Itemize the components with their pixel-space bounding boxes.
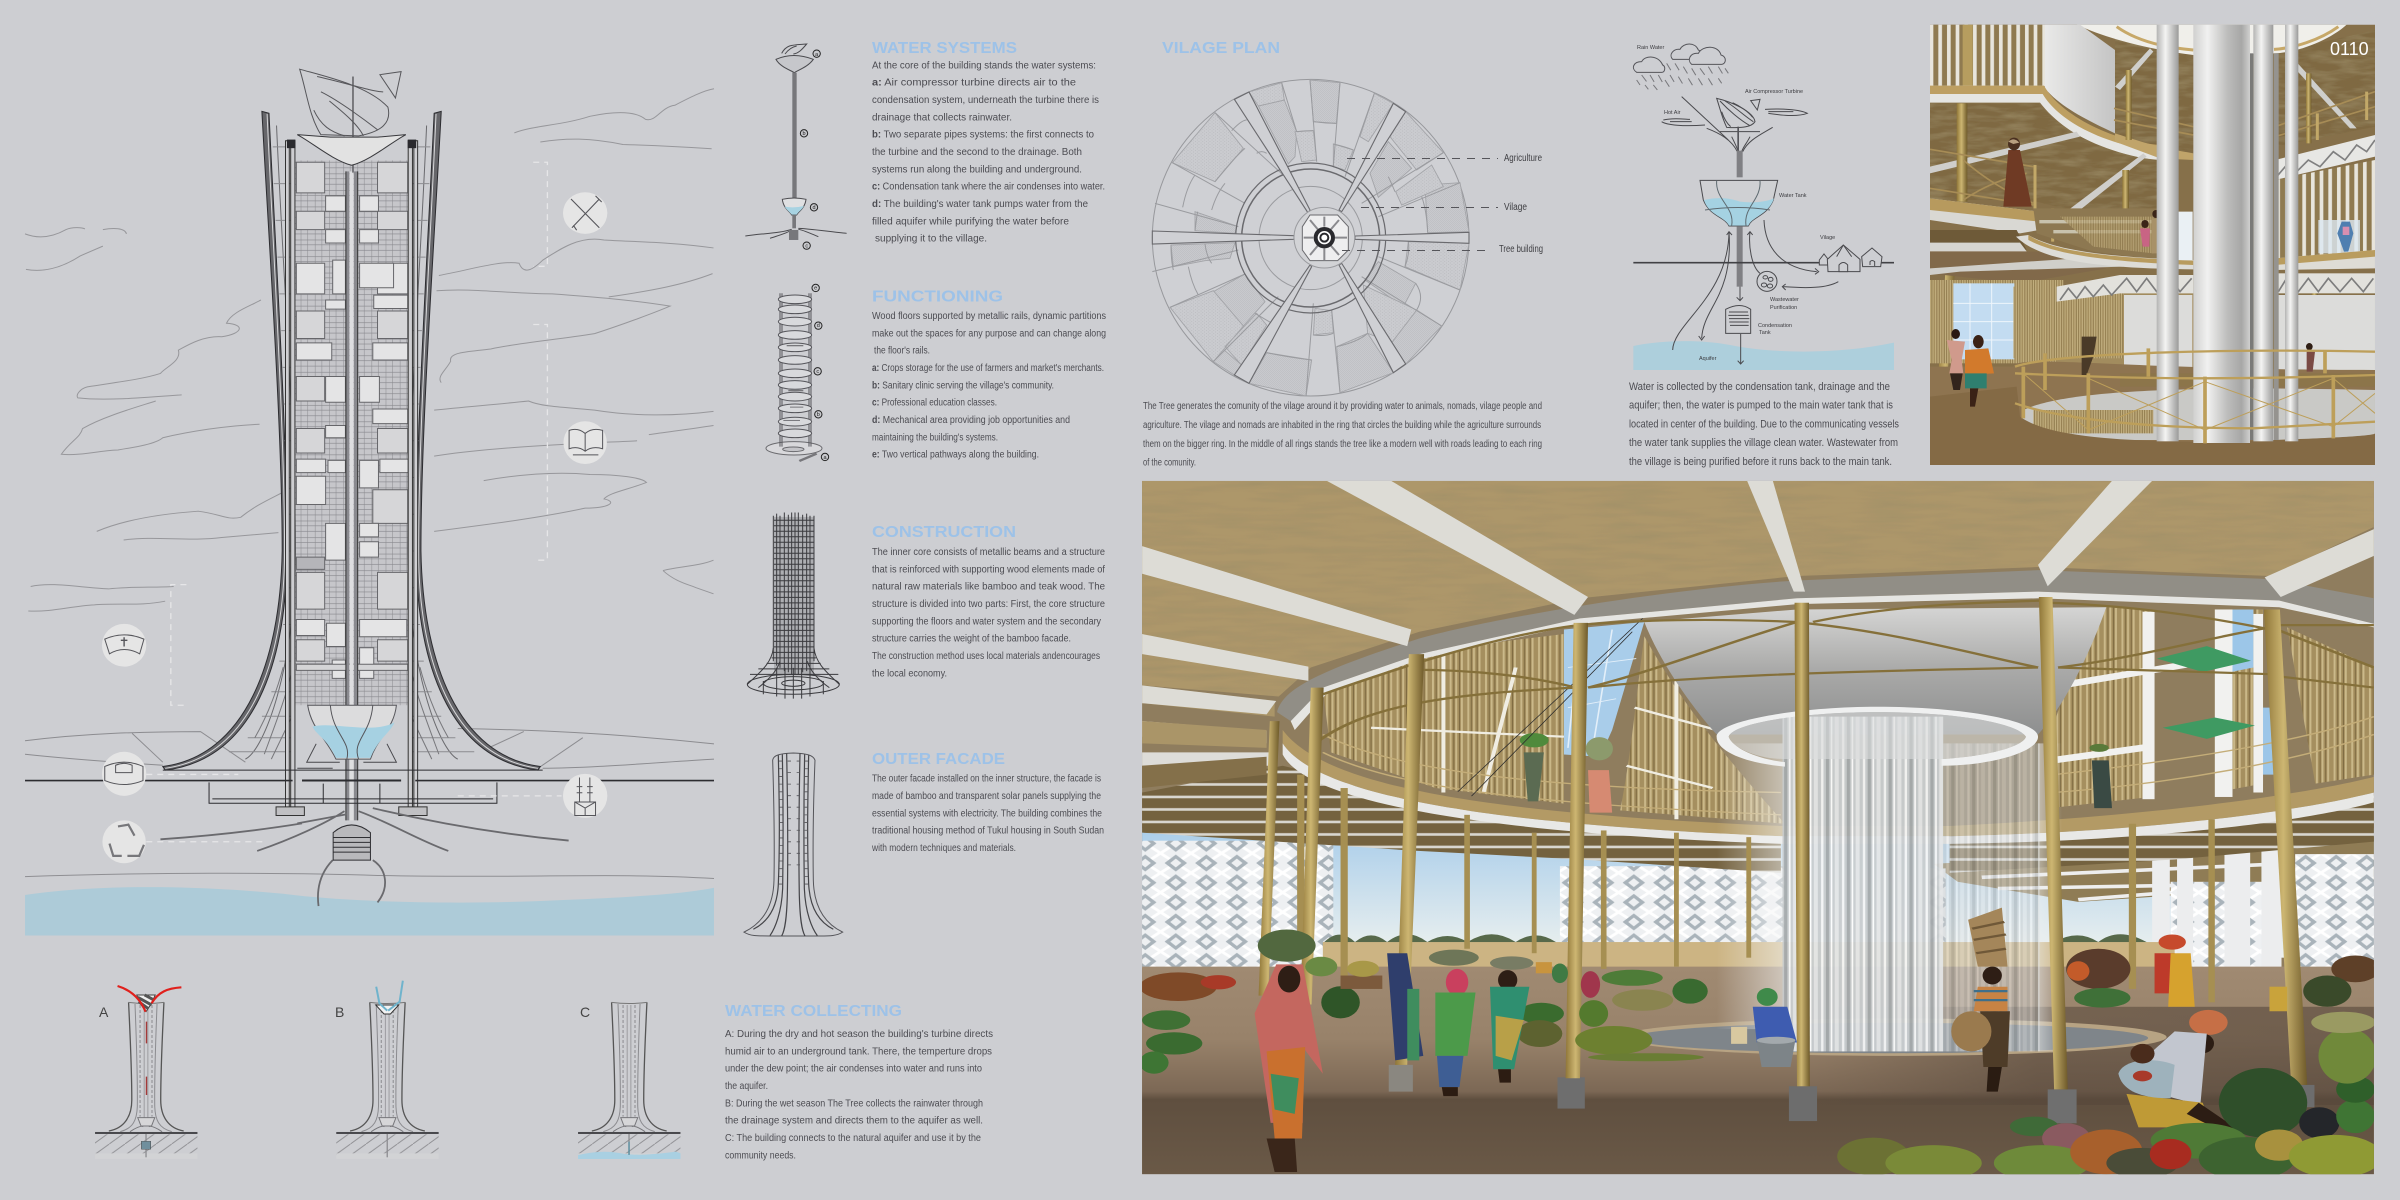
- diagram A letter: A: [99, 1004, 109, 1020]
- water cycle labels: Hot Air: [1664, 110, 1681, 116]
- sky: [1142, 828, 2374, 958]
- water tank: [1700, 180, 1778, 226]
- white drum wall: [2045, 25, 2115, 133]
- turbine leaf: [300, 69, 401, 173]
- lower ceiling below gallery: [1142, 766, 1781, 873]
- top left railing: [1930, 25, 2045, 86]
- text: village plan: agriculture. The vilage and nomads are inhabited in the ring that circles the building while the agriculture surrounds: [1143, 420, 1541, 431]
- text: village plan: of the comunity.: [1143, 458, 1196, 469]
- water cycle labels: Water Tank: [1779, 193, 1807, 199]
- text: water systems: filled aquifer while purifying the water before: [872, 216, 1069, 227]
- text: water cycle: Water is collected by the condensation tank, drainage and the: [1629, 381, 1890, 393]
- text: water systems: [872, 60, 1105, 245]
- bamboo facade left: [1323, 634, 1564, 804]
- bamboo posts: [1939, 70, 2318, 367]
- component markers a to d: [800, 50, 820, 249]
- central water pipes: [346, 171, 358, 820]
- seated mother with baby: [2118, 1010, 2235, 1134]
- wood ceiling: [1142, 481, 2374, 697]
- waterfall: [1717, 717, 2062, 1051]
- project number: 0110: [2330, 38, 2369, 59]
- text: functioning: e: Two vertical pathways along the building.: [872, 450, 1039, 461]
- text: e: [814, 286, 817, 292]
- upper wooden ceilings: [2115, 30, 2375, 160]
- bamboo railing around void: [2015, 348, 2375, 443]
- water cycle labels: Tank: [1759, 330, 1771, 336]
- ground level and basement: [25, 744, 714, 803]
- wastewater purification: [1757, 271, 1777, 291]
- text: water systems: a: Air compressor turbine directs air to the: [872, 78, 1076, 89]
- lower wall, truss and solar window: [1930, 280, 2063, 363]
- water cycle labels: Air Compressor Turbine: [1745, 89, 1803, 95]
- diagram C letter: C: [580, 1004, 590, 1020]
- text: functioning: the floor's rails.: [874, 346, 930, 357]
- upper rope rails: [1930, 92, 2375, 250]
- left market produce: [1140, 957, 1382, 1074]
- small figures on walkway: [2140, 210, 2353, 253]
- mini diagram: outer facade: [744, 753, 843, 936]
- text: outer facade: made of bamboo and transparent solar panels supplying the: [872, 791, 1101, 802]
- dry field: [1322, 942, 2175, 967]
- gallery floor ring: [1283, 730, 2374, 836]
- condensation tank: [333, 825, 370, 860]
- ground line: [1633, 262, 1894, 264]
- woman on balcony: [2003, 138, 2032, 207]
- clouds and rain: [1633, 44, 1725, 72]
- text: water systems: b: Two separate pipes systems: the first connects to: [872, 130, 1094, 141]
- dashed callout brackets: [146, 162, 562, 842]
- text: functioning: make out the spaces for any purpose and can change along: [872, 328, 1106, 339]
- centre market produce: [1517, 962, 1708, 1061]
- diagram B letter: B: [335, 1004, 344, 1020]
- water tank: [308, 705, 396, 759]
- lattice screens: [1142, 840, 2374, 968]
- text: functioning: b: Sanitary clinic serving the village's community.: [872, 380, 1054, 391]
- heading: outer facade: OUTER FACADE: [872, 751, 1005, 768]
- text: construction: structure carries the weight of the bamboo facade.: [872, 634, 1071, 645]
- village plan circle: [1152, 79, 1469, 396]
- skylight ring: [2077, 25, 2347, 55]
- tower shell and columns: [163, 111, 540, 815]
- text: construction: the local economy.: [872, 668, 947, 679]
- text: water cycle: the village is being purified before it runs back to the main tank.: [1629, 456, 1892, 468]
- text: c: [816, 369, 819, 375]
- curved walkway with slats: [2034, 208, 2156, 254]
- right white slats and truss: [2275, 135, 2375, 180]
- woman behind column: [1387, 953, 1423, 1060]
- diagram A: dry season air flow: [95, 986, 197, 1159]
- running children: [1947, 329, 1994, 407]
- text: water cycle: located in center of the building. Due to the communicating vessels: [1629, 418, 1899, 430]
- text: water systems: condensation system, underneath the turbine there is: [872, 95, 1099, 106]
- text: outer facade: The outer facade installed on the inner structure, the facade is: [872, 774, 1101, 785]
- text: water systems: c: Condensation tank where the air condenses into water.: [872, 182, 1105, 193]
- text: water collecting: [725, 1029, 993, 1161]
- bamboo columns with concrete bases: [1259, 597, 2314, 1123]
- text: construction: The construction method uses local materials andencourages: [872, 651, 1100, 662]
- thin rear columns: [1297, 775, 2215, 1002]
- water cycle labels: [1637, 45, 1835, 362]
- white roof beams: [1142, 481, 2374, 714]
- far market stalls: [2066, 934, 2380, 1011]
- thin diagonal cables: [1458, 618, 1643, 796]
- text: water collecting: B: During the wet season The Tree collects the rainwater through: [725, 1098, 983, 1109]
- plan labels: Vilage: [1504, 202, 1527, 213]
- text: water cycle: aquifer; then, the water is pumped to the main water tank that is: [1629, 400, 1893, 412]
- icon: recycling: [102, 820, 146, 863]
- left tiered ceiling: [1142, 685, 1275, 748]
- hatched and dotted agriculture plots: [1170, 80, 1469, 396]
- heading: functioning: FUNCTIONING: [872, 289, 1003, 306]
- central pipe: [1737, 127, 1743, 287]
- water cycle diagram: [1633, 44, 1894, 370]
- market woman with basin one: [1429, 950, 1479, 1096]
- plan labels: Agriculture: [1504, 153, 1542, 164]
- text: water collecting: under the dew point; the air condenses into water and runs into: [725, 1064, 982, 1075]
- main render: market under the tree with waterfall: [1140, 481, 2382, 1181]
- mid ceilings: [1930, 103, 2158, 210]
- mini diagram: water systems: [745, 44, 847, 249]
- text: water systems: supplying it to the village.: [875, 234, 987, 245]
- text: water collecting: A: During the dry and hot season the building's turbine directs: [725, 1029, 993, 1040]
- market woman with basin two: [1490, 956, 1533, 1083]
- white scaffolding: [2054, 609, 2263, 799]
- aquifer band: [1633, 341, 1894, 370]
- mini diagram: functioning floors: [766, 284, 829, 462]
- icon: nurse cap: [102, 624, 146, 667]
- text: outer facade: essential systems with electricity. The building combines the: [872, 808, 1102, 819]
- text: c: [805, 244, 808, 250]
- horizon tree line: [1323, 934, 2147, 947]
- text: functioning: [872, 311, 1106, 461]
- plan labels: Tree building: [1499, 244, 1543, 255]
- void below floor: [2020, 389, 2375, 440]
- text: water cycle: [1629, 381, 1899, 468]
- ring beam: [1277, 570, 2374, 721]
- icon: tools: [563, 192, 607, 234]
- diagram C: aquifer connection: [578, 1002, 680, 1159]
- distant roof on right: [1934, 837, 2374, 902]
- main bamboo arches: [1315, 601, 2374, 743]
- icon: crate with plants: [563, 774, 607, 818]
- icon: storage drums: [102, 752, 146, 796]
- white posts on right: [2152, 850, 2282, 967]
- text: functioning: a: Crops storage for the use of farmers and market's merchants.: [872, 363, 1104, 374]
- text: construction: supporting the floors and water system and the secondary: [872, 616, 1101, 627]
- tree building hub: [1294, 207, 1355, 268]
- ground plan lines: [25, 729, 714, 768]
- green shelves: [2157, 646, 2255, 739]
- text: water cycle: the water tank supplies the village clean water. Wastewater from: [1629, 437, 1898, 449]
- shadow over right ground: [1871, 1006, 2374, 1105]
- heading: water systems: WATER SYSTEMS: [872, 40, 1017, 57]
- text: functioning: c: Professional education classes.: [872, 398, 997, 409]
- mezzanine slab: [1930, 86, 2160, 160]
- text: construction: The inner core consists of metallic beams and a structure: [872, 547, 1105, 558]
- interior render: spiral floors and water pipes: [1930, 25, 2375, 465]
- tower core rooms: [296, 162, 408, 678]
- woman filling a bucket: [1731, 988, 1797, 1067]
- plot dividers: [1152, 80, 1460, 396]
- text: water collecting: the aquifer.: [725, 1081, 768, 1092]
- text: water systems: d: The building's water tank pumps water from the: [872, 199, 1088, 210]
- text: outer facade: [871, 774, 1104, 854]
- gallery rope rail: [1323, 717, 2374, 815]
- text: water systems: the turbine and the second to the drainage. Both: [872, 147, 1082, 158]
- icon: book and pencil: [563, 421, 607, 464]
- text: village plan: them on the bigger ring. In the middle of all rings stands the tree like a modern well with roads leading to each ring: [1143, 439, 1542, 450]
- bamboo cone centre: [1620, 636, 1785, 824]
- water cycle labels: Vilage: [1820, 235, 1835, 241]
- plan labels: [1499, 153, 1543, 255]
- text: a: [815, 52, 819, 58]
- diagram B: wet season rainwater: [336, 981, 439, 1159]
- main floor: [1936, 362, 2375, 396]
- water cycle labels: Condensation: [1758, 323, 1792, 329]
- text: construction: that is reinforced with supporting wood elements made of: [872, 564, 1105, 575]
- water cycle labels: Wastewater: [1770, 297, 1799, 303]
- text: village plan: [1143, 401, 1542, 469]
- text: d: [817, 323, 820, 329]
- water cycle labels: Purification: [1770, 305, 1797, 311]
- text: water systems: At the core of the building stands the water systems:: [872, 60, 1096, 71]
- text: construction: [872, 547, 1105, 679]
- text: construction: natural raw materials like bamboo and teak wood. The: [872, 582, 1105, 593]
- text: b: [817, 412, 820, 418]
- bamboo facade right: [2050, 607, 2151, 808]
- text: functioning: Wood floors supported by metallic rails, dynamic partitions: [872, 311, 1106, 322]
- text: b: [802, 131, 806, 137]
- market ground: [1142, 967, 2374, 1174]
- water cycle labels: Rain Water: [1637, 45, 1664, 51]
- text: functioning: maintaining the building's systems.: [872, 432, 998, 443]
- funnel above waterfall: [1644, 607, 2106, 734]
- village ring: [1236, 163, 1386, 313]
- floor markers a to e: [812, 284, 829, 461]
- foreground produce: [1837, 1012, 2382, 1181]
- text: water collecting: C: The building connects to the natural aquifer and use it by the: [725, 1133, 981, 1144]
- water cycle labels: Aquifer: [1699, 356, 1717, 362]
- plan leader lines: [1342, 158, 1498, 250]
- text: outer facade: traditional housing method of Tukul housing in South Sudan: [872, 826, 1104, 837]
- tower core floors: [295, 160, 409, 705]
- section drawing: tower with sky, tank and aquifer: [25, 69, 714, 935]
- waterfall rim: [1717, 707, 2038, 767]
- flow arrows: [1673, 220, 1838, 364]
- heading: water collecting: WATER COLLECTING: [725, 1003, 902, 1020]
- sky contour lines: [25, 89, 714, 611]
- text: outer facade: with modern techniques and materials.: [871, 843, 1016, 854]
- turbine and funnel: [1662, 97, 1807, 152]
- radial roads: [1152, 92, 1469, 383]
- central vertical pipes: [2157, 25, 2298, 443]
- distant figures: [2082, 337, 2315, 375]
- solar panel glimpse: [1564, 622, 1644, 757]
- round pool: [1620, 1018, 2167, 1056]
- market woman with pink shawl: [1255, 930, 1323, 1172]
- text: water systems: drainage that collects rainwater.: [872, 112, 1012, 123]
- aquifer: [25, 887, 714, 935]
- figures on gallery: [1520, 733, 2112, 813]
- text: d: [812, 205, 816, 211]
- text: a: [823, 455, 827, 461]
- text: construction: structure is divided into two parts: First, the core structure: [872, 599, 1105, 610]
- text: water collecting: the drainage system and directs them to the aquifer as well.: [725, 1116, 983, 1127]
- heading: construction: CONSTRUCTION: [872, 524, 1016, 541]
- village huts: [1819, 245, 1882, 272]
- mini diagram: construction frame: [747, 513, 839, 699]
- heading: village plan: VILAGE PLAN: [1162, 40, 1280, 57]
- condensation tank: [1726, 305, 1751, 333]
- woman with stacked baskets: [1951, 908, 2010, 1092]
- balcony slab: [1930, 198, 2039, 233]
- text: water collecting: community needs.: [725, 1150, 796, 1161]
- underground pipes: [160, 808, 569, 906]
- text: water systems: systems run along the building and underground.: [872, 164, 1082, 175]
- text: functioning: d: Mechanical area providing job opportunities and: [872, 415, 1070, 426]
- roof funnel: [297, 135, 406, 165]
- text: water collecting: humid air to an underground tank. There, the temperture drops: [725, 1046, 992, 1057]
- text: village plan: The Tree generates the comunity of the vilage around it by providing water to animals, nomads, vilage people and: [1143, 401, 1542, 412]
